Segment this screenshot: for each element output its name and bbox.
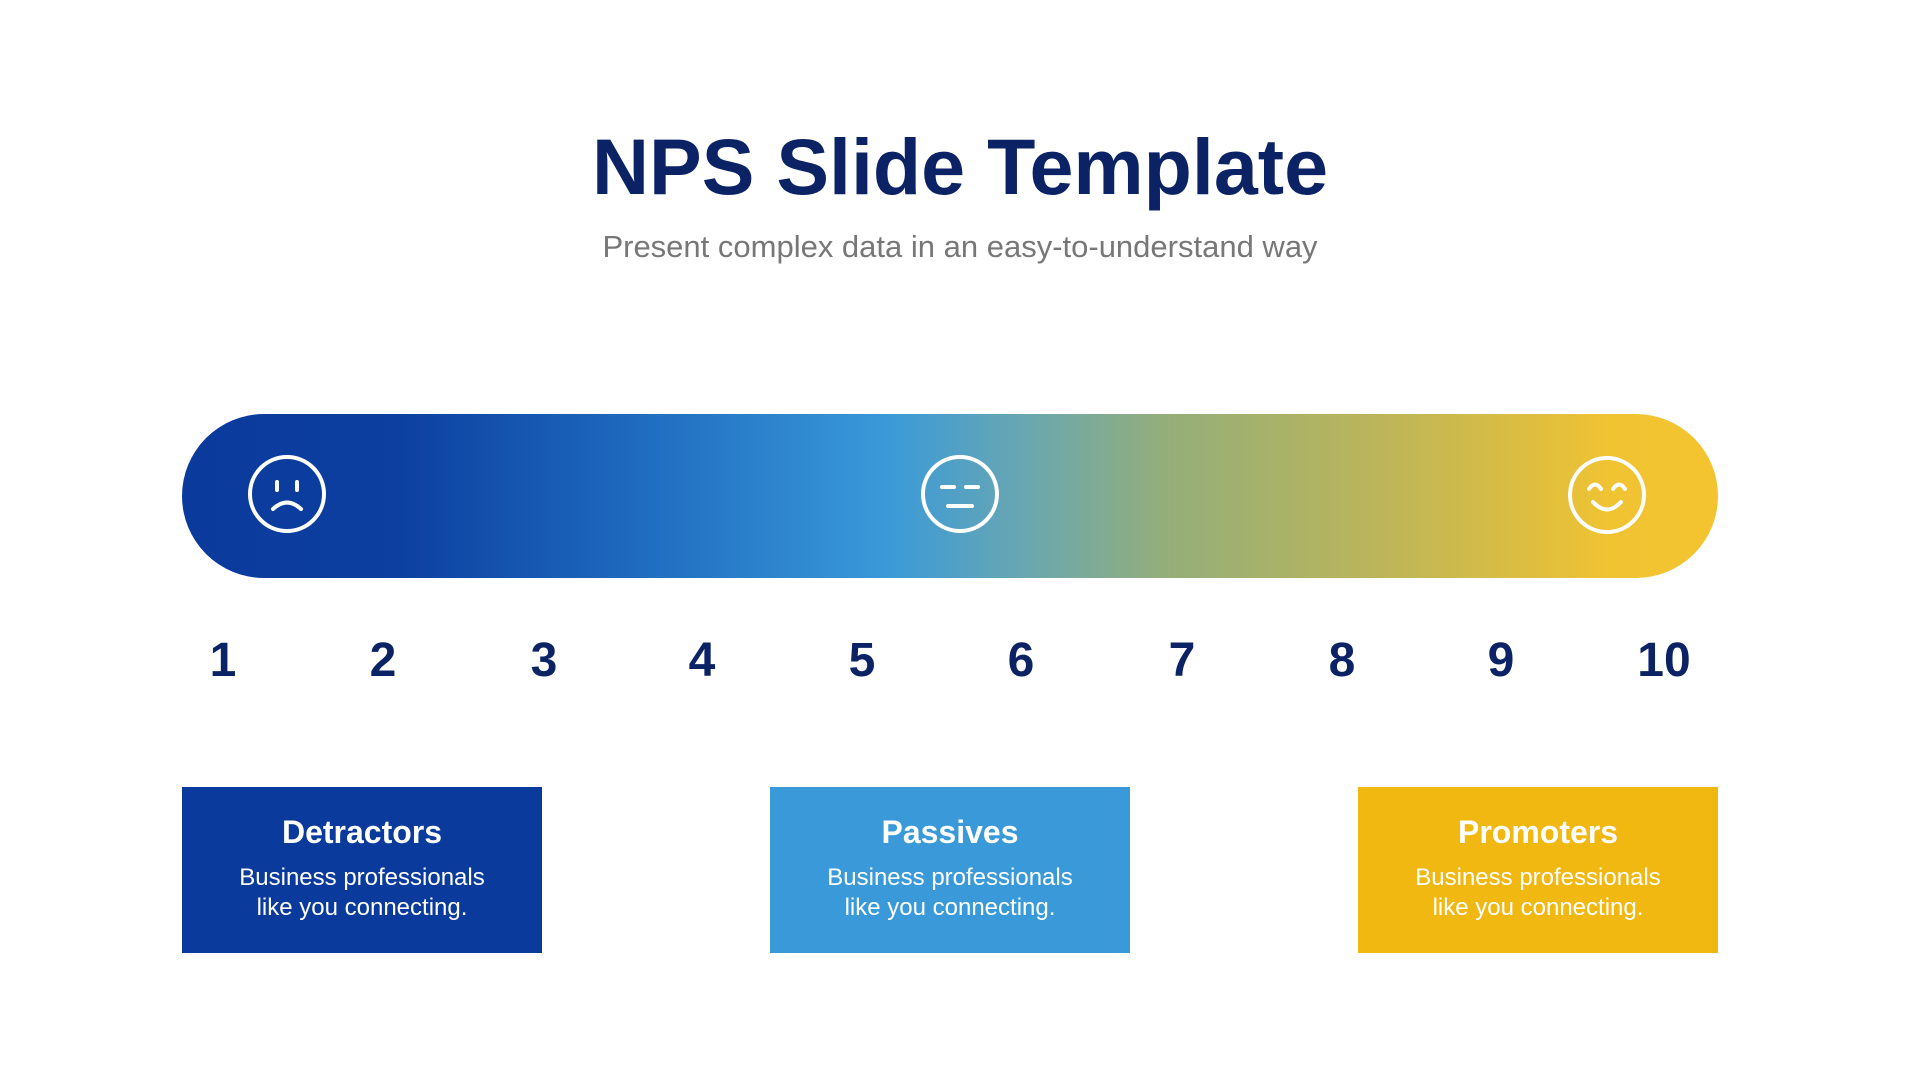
score numbers: 8: [1329, 634, 1355, 687]
panel: detractors: [182, 787, 542, 953]
score numbers: 10: [1637, 634, 1691, 687]
score numbers: 2: [370, 634, 396, 687]
subtitle: Present complex data in an easy-to-understand way: [602, 229, 1318, 264]
score numbers: 3: [531, 634, 557, 687]
icon: happy face: [1568, 456, 1646, 534]
panel: promoters: [1358, 787, 1718, 953]
panel: passives: like you connecting.: [845, 894, 1055, 921]
score numbers: 1: [210, 634, 236, 687]
icon: sad face: [248, 455, 326, 533]
panel: passives: Business professionals: [827, 864, 1073, 891]
score numbers: 9: [1488, 634, 1514, 687]
panel: promoters: Business professionals: [1415, 864, 1661, 891]
title: NPS Slide Template: [592, 122, 1328, 211]
panel: promoters: like you connecting.: [1433, 894, 1643, 921]
panel: detractors: like you connecting.: [257, 894, 467, 921]
panel: passives: Passives: [881, 814, 1018, 850]
panel: passives: [770, 787, 1130, 953]
score numbers: 7: [1169, 634, 1195, 687]
icon: neutral face: [921, 455, 999, 533]
score numbers: 5: [849, 634, 875, 687]
panel: promoters: Promoters: [1458, 814, 1618, 850]
score numbers: 6: [1008, 634, 1034, 687]
panel: detractors: Business professionals: [239, 864, 485, 891]
panel: detractors: Detractors: [282, 814, 442, 850]
score numbers: 4: [689, 634, 715, 687]
gradient scale bar: [182, 414, 1718, 578]
score numbers: [210, 634, 1691, 687]
